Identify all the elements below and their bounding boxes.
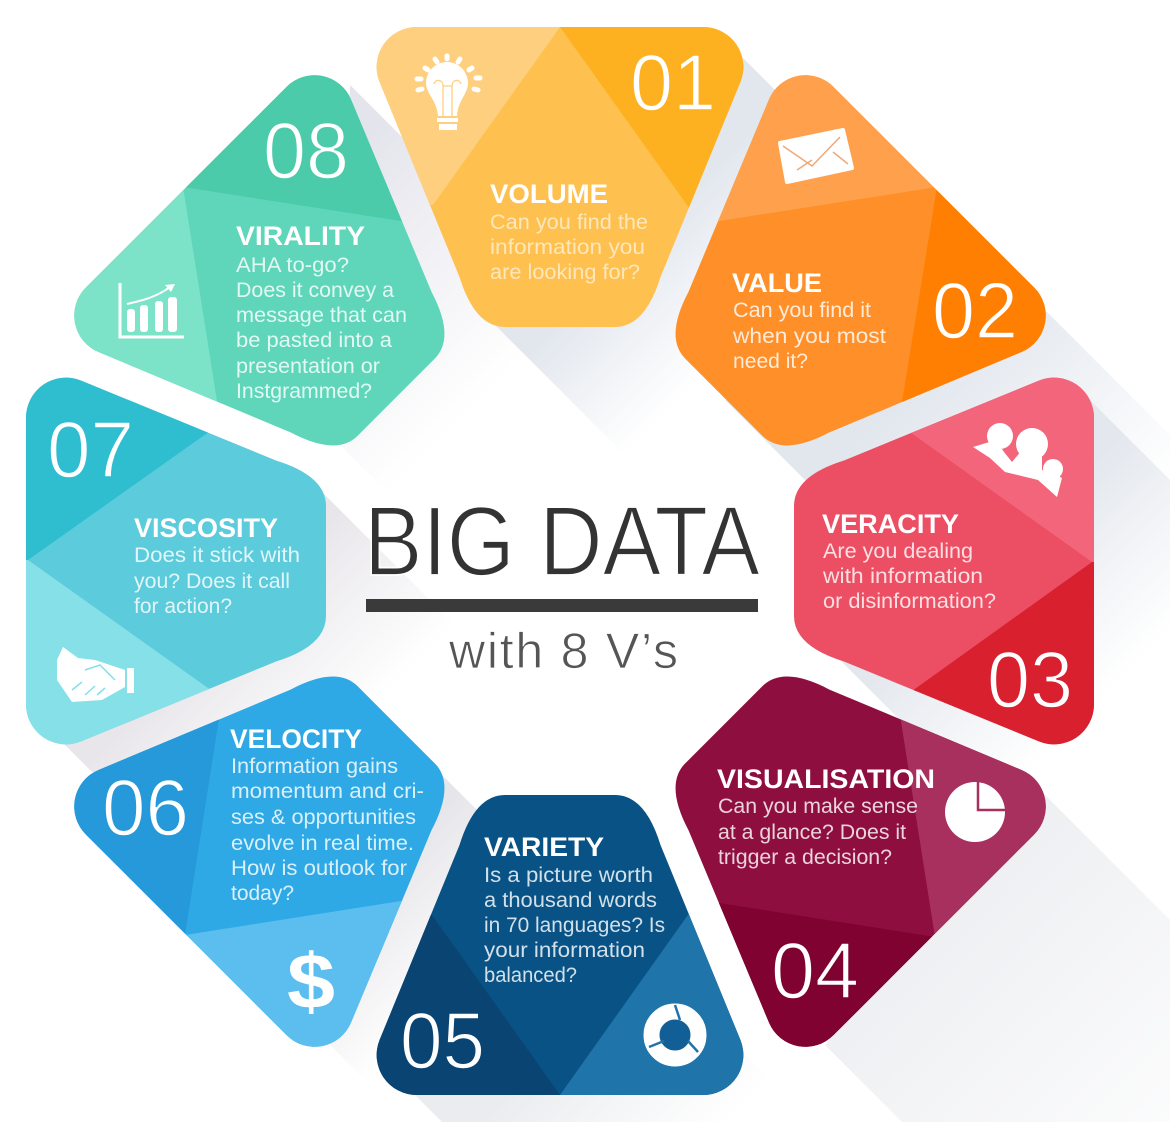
text: variety description: balanced? (484, 964, 577, 987)
text: veracity description: or disinformation? (823, 590, 996, 613)
text: velocity description: ses & opportunities (231, 806, 416, 829)
panel: visualisation (676, 676, 1046, 1047)
icon: growth chart (120, 283, 184, 337)
heading: VERACITY: VERACITY (822, 509, 959, 539)
text: visualisation description: trigger a decision? (718, 846, 892, 869)
text: variety description (484, 864, 665, 987)
text: veracity description: Are you dealing (823, 540, 973, 563)
heading: VIRALITY: VIRALITY (236, 221, 365, 251)
panel: viscosity (26, 378, 326, 744)
text: velocity description: evolve in real time. (231, 832, 414, 855)
text: virality description: presentation or (236, 355, 380, 378)
heading: VARIETY: VARIETY (484, 832, 604, 862)
panel: variety (376, 795, 744, 1095)
text: virality description: AHA to-go? (236, 254, 349, 277)
text: variety description: your information (484, 939, 645, 962)
text: virality description: Does it convey a (236, 279, 394, 302)
text: velocity description: today? (231, 882, 294, 905)
text: viscosity description: you? Does it call (134, 570, 290, 593)
text: veracity description (822, 540, 996, 613)
icon: pie chart (945, 780, 1009, 842)
text: virality description: message that can (236, 304, 407, 327)
text: virality description (236, 254, 407, 403)
icon: handshake (57, 647, 134, 702)
icon: cycle arrows (649, 1005, 698, 1058)
panel: virality (74, 75, 444, 446)
text: veracity description: with information (822, 565, 983, 588)
number 06: 06 (102, 763, 189, 852)
heading: VISCOSITY: VISCOSITY (134, 513, 278, 543)
number 02: 02 (932, 266, 1018, 355)
icon: people (973, 423, 1063, 497)
text: viscosity description: Does it stick with (134, 544, 300, 567)
icon: dollar sign: $ (287, 937, 335, 1025)
text: variety description: in 70 languages? Is (484, 914, 665, 937)
text: viscosity description (134, 544, 300, 618)
number 07: 07 (47, 405, 134, 494)
text: volume description: Can you find the (490, 211, 648, 234)
title rule (366, 599, 758, 612)
text: virality description: be pasted into a (236, 329, 392, 352)
icon: lightbulb (417, 56, 480, 130)
text: velocity description: How is outlook for (231, 857, 407, 880)
text: volume description: are looking for? (490, 261, 640, 284)
text: viscosity description: for action? (134, 595, 232, 618)
number 08: 08 (263, 106, 349, 195)
number 03: 03 (987, 635, 1073, 724)
text: velocity description: momentum and cri- (231, 780, 424, 803)
heading: BIG DATA: BIG DATA (364, 486, 761, 596)
text: variety description: Is a picture worth (484, 864, 653, 887)
heading: VALUE: VALUE (732, 268, 822, 298)
text: value description: Can you find it (733, 299, 871, 322)
heading: VOLUME: VOLUME (490, 179, 608, 209)
title (364, 486, 761, 679)
text: volume description (490, 211, 648, 284)
icon: envelope (780, 130, 852, 182)
subtitle: with 8 V’s (448, 623, 678, 679)
text: visualisation description (718, 795, 918, 869)
text: visualisation description: at a glance? Does it (718, 821, 906, 844)
text: velocity description: Information gains (231, 755, 398, 778)
number 04: 04 (771, 926, 859, 1015)
text: value description: need it? (733, 350, 808, 373)
panel: value (676, 75, 1046, 446)
text: variety description: a thousand words (484, 889, 657, 912)
text: visualisation description: Can you make sense (718, 795, 918, 818)
text: velocity description (231, 755, 424, 905)
heading: VISUALISATION: VISUALISATION (717, 764, 935, 794)
panel: veracity (794, 378, 1094, 744)
text: virality description: Instgrammed? (236, 380, 372, 403)
number 01: 01 (630, 38, 716, 127)
panel: volume (376, 27, 744, 327)
text: value description (732, 299, 886, 373)
text: value description: when you most (732, 325, 886, 348)
panel: velocity (74, 676, 444, 1047)
text: volume description: information you (490, 236, 645, 259)
number 05: 05 (400, 996, 485, 1085)
heading: VELOCITY: VELOCITY (230, 724, 362, 754)
